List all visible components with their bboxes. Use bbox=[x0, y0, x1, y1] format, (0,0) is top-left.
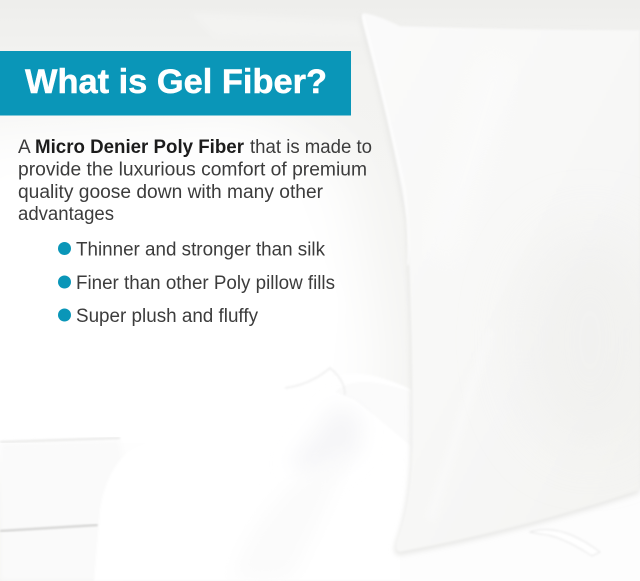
intro paragraph: provide the luxurious comfort of premium bbox=[18, 160, 367, 180]
photo: white fade over left side bbox=[0, 110, 385, 470]
photo: front pillow bbox=[361, 13, 640, 555]
intro paragraph: A bbox=[18, 137, 31, 158]
bullet: thinner and stronger: Thinner and stronger than silk bbox=[76, 240, 325, 260]
bullet: finer than other fills: Finer than other Poly pillow fills bbox=[76, 273, 335, 294]
photo: crumpled white sheet bbox=[94, 368, 640, 581]
intro paragraph: advantages bbox=[18, 204, 114, 225]
bullet list bbox=[58, 240, 335, 327]
bullet: super plush: Super plush and fluffy bbox=[76, 306, 258, 327]
photo: floor panels bbox=[0, 438, 125, 581]
title banner bbox=[0, 51, 351, 116]
photo: back pillow edge bbox=[190, 13, 370, 40]
title: What is Gel Fiber? bbox=[25, 63, 327, 101]
intro paragraph: Micro Denier Poly Fiber bbox=[35, 137, 245, 158]
intro paragraph bbox=[18, 137, 372, 225]
intro paragraph: that is made to bbox=[250, 137, 372, 158]
intro paragraph: quality goose down with many other bbox=[18, 182, 324, 203]
